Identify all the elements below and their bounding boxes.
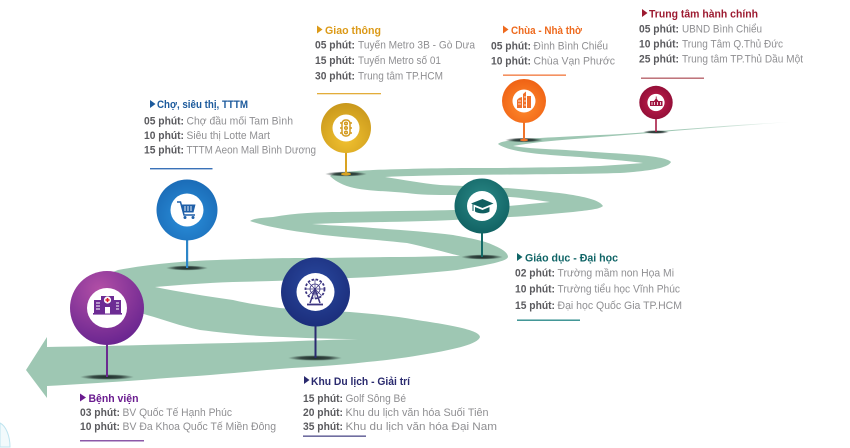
text block: administration: 10 phút: (639, 38, 679, 50)
text block: administration: Trung tâm hành chính (649, 8, 758, 20)
pin: hospital (70, 271, 144, 380)
text block: education: Đại học Quốc Gia TP.HCM (558, 300, 682, 312)
text block: church: 10 phút: (491, 56, 531, 68)
text block: tourism: 20 phút: (303, 407, 343, 419)
winding road with arrow (26, 130, 672, 398)
text block: traffic: Tuyến Metro 3B - Gò Dưa (358, 40, 475, 52)
text block: church (491, 25, 616, 76)
text block: tourism: 35 phút: (303, 421, 343, 433)
text block: administration (639, 8, 803, 79)
text block: traffic: 15 phút: (315, 55, 355, 67)
icon: traffic light (340, 120, 352, 136)
icon: church building (517, 92, 531, 108)
text block: tourism: 15 phút: (303, 393, 343, 405)
text block: hospital: Bệnh viện (88, 393, 139, 405)
text block: church: Chùa Vạn Phước (534, 56, 616, 68)
text block: education (515, 252, 682, 321)
text block: traffic (315, 25, 475, 94)
text block: hospital: BV Đa Khoa Quốc Tế Miền Đông (122, 421, 276, 433)
text block: administration: 05 phút: (639, 24, 679, 36)
text block: church: 05 phút: (491, 40, 531, 52)
icon: graduation cap (471, 199, 494, 213)
text block: hospital: 10 phút: (80, 421, 120, 433)
text block: hospital: 03 phút: (80, 407, 120, 419)
text block: hospital (80, 393, 276, 442)
pin: church (502, 79, 546, 142)
text block: traffic: Trung tâm TP.HCM (358, 70, 443, 82)
text block: administration: Trung Tâm Q.Thủ Đức (682, 38, 784, 50)
text block: traffic: Giao thông (325, 25, 381, 37)
text block: administration: 25 phút: (639, 54, 679, 66)
text block: education: 10 phút: (515, 284, 555, 296)
text block: education: Trường mầm non Họa Mi (558, 268, 674, 280)
text block: tourism: Khu Du lịch - Giải trí (311, 376, 411, 388)
text block: church: Chùa - Nhà thờ (511, 25, 582, 37)
icon: shopping cart (177, 202, 196, 219)
text block: shopping: Chợ, siêu thị, TTTM (157, 99, 248, 111)
pin: administration (639, 86, 673, 134)
text block: church: Đình Bình Chiểu (534, 40, 608, 52)
text block: education: Giáo dục - Đại học (525, 252, 618, 264)
icon: hospital building (93, 296, 122, 315)
text block: shopping: TTTM Aeon Mall Bình Dương (186, 144, 316, 156)
text block: traffic: 05 phút: (315, 40, 355, 52)
road tail fading to the right (672, 122, 790, 131)
pin: education (454, 178, 510, 260)
text block: tourism (303, 376, 497, 437)
text block: education: 15 phút: (515, 300, 555, 312)
text block: education: 02 phút: (515, 268, 555, 280)
text block: tourism: Golf Sông Bé (346, 393, 406, 405)
text block: traffic: Tuyến Metro số 01 (358, 55, 441, 67)
text block: administration: UBND Bình Chiểu (682, 24, 762, 36)
text block: administration: Trung tâm TP.Thủ Dầu Một (682, 54, 803, 66)
text block: tourism: Khu du lịch văn hóa Suối Tiên (346, 407, 488, 419)
text block: tourism: Khu du lịch văn hóa Đại Nam (346, 421, 497, 433)
pin: tourism (281, 258, 350, 361)
text block: hospital: BV Quốc Tế Hạnh Phúc (122, 407, 233, 419)
pin: traffic (321, 103, 371, 176)
text block: shopping: 10 phút: (144, 130, 184, 142)
icon: administrative building (650, 96, 662, 106)
text block: shopping: Siêu thị Lotte Mart (186, 130, 270, 142)
text block: shopping (144, 99, 316, 169)
text block: shopping: 05 phút: (144, 116, 184, 128)
text block: education: Trường tiểu học Vĩnh Phúc (558, 284, 681, 296)
text block: shopping: 15 phút: (144, 144, 184, 156)
decorative arc bottom left (0, 423, 10, 447)
icon: ferris wheel (306, 280, 324, 304)
text block: shopping: Chợ đầu mối Tam Bình (186, 116, 293, 128)
text block: traffic: 30 phút: (315, 70, 355, 82)
pin: shopping (156, 180, 218, 270)
